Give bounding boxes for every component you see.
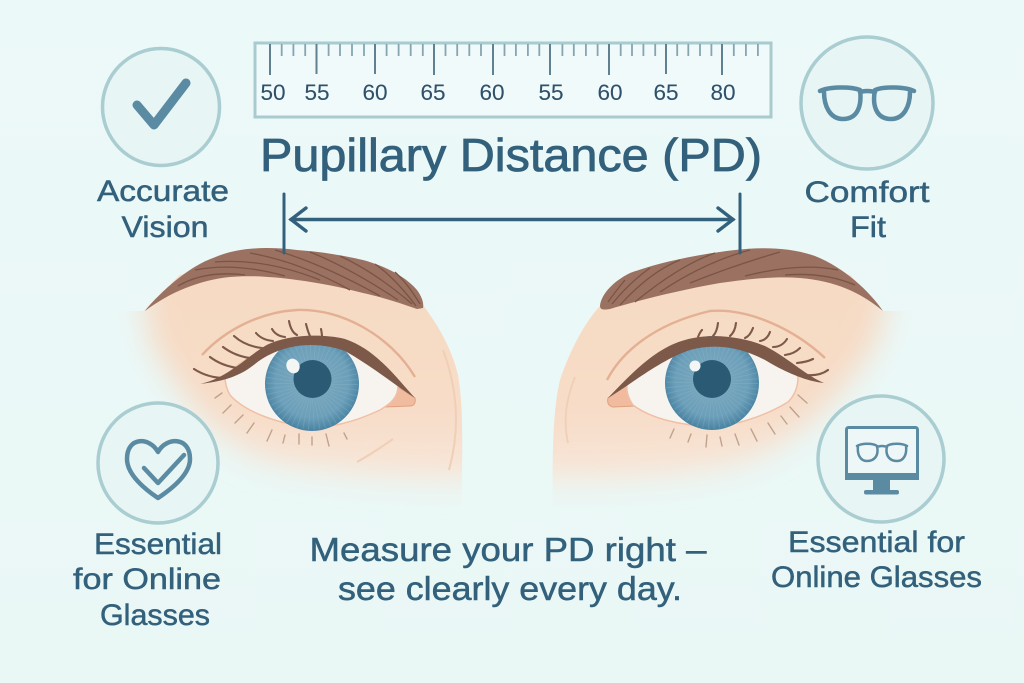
ruler: 65: [420, 80, 446, 105]
label: essential for online glasses: [771, 526, 982, 594]
ruler: 60: [597, 80, 623, 105]
ruler: 55: [538, 80, 564, 105]
label: essential for online glasses: Essential: [94, 528, 222, 561]
essential for online glasses callout, left: [73, 403, 222, 632]
label: accurate vision: Accurate: [97, 175, 229, 208]
left cheek lines: [357, 350, 456, 470]
ruler: 60: [479, 80, 505, 105]
left eyebrow: [145, 248, 423, 311]
left skin: [131, 274, 462, 489]
left upper lid and lashes: [194, 321, 415, 398]
title: Pupillary Distance (PD): [260, 129, 762, 181]
ruler: 65: [653, 80, 679, 105]
tagline: [310, 532, 707, 608]
ruler: 50: [260, 80, 286, 105]
left tear duct: [385, 385, 415, 407]
label: accurate vision: Vision: [122, 211, 208, 244]
accurate vision callout: [97, 48, 229, 244]
label: essential for online glasses: Online Glasses: [771, 561, 982, 594]
essential for online glasses callout, right: [771, 396, 982, 594]
icon: heart with check: [98, 403, 218, 523]
icon: check mark: [102, 48, 220, 166]
ruler: 55: [304, 80, 330, 105]
ruler: [255, 43, 771, 117]
right eyelid crease: [607, 311, 825, 380]
left highlight: [284, 356, 302, 376]
label: accurate vision: [97, 175, 229, 244]
icon: glasses: [801, 37, 933, 169]
label: essential for online glasses: Glasses: [100, 599, 210, 632]
label: essential for online glasses: Essential for: [788, 526, 965, 559]
left eyelid crease: [202, 310, 415, 377]
left sclera: [225, 338, 398, 427]
right cheek line: [566, 377, 575, 443]
label: essential for online glasses: for Online: [73, 563, 221, 596]
tagline: Measure your PD right –: [310, 532, 707, 569]
right eye illustration: [515, 240, 900, 479]
measurement arrow: [284, 194, 740, 253]
label: comfort fit: Comfort: [804, 176, 930, 209]
ruler: 80: [710, 80, 736, 105]
tagline: see clearly every day.: [338, 571, 682, 608]
right highlight: [690, 360, 700, 372]
label: comfort fit: Fit: [850, 211, 887, 244]
right skin: [552, 274, 899, 489]
left iris: [265, 337, 359, 431]
right iris: [665, 336, 759, 430]
left lower lashes: [215, 393, 347, 446]
label: essential for online glasses: [73, 528, 222, 632]
right tear duct: [608, 382, 636, 407]
left eye illustration: [135, 240, 500, 479]
right eyebrow: [600, 248, 883, 311]
label: comfort fit: [804, 176, 930, 244]
infographic canvas: [73, 35, 982, 626]
right sclera: [627, 337, 798, 426]
ruler: 60: [362, 80, 388, 105]
comfort fit callout: [801, 37, 933, 244]
right lower lashes: [670, 395, 807, 447]
right pupil: [693, 360, 731, 398]
icon: monitor with glasses: [818, 396, 944, 522]
left pupil: [294, 360, 332, 398]
right upper lid and lashes: [608, 323, 828, 398]
